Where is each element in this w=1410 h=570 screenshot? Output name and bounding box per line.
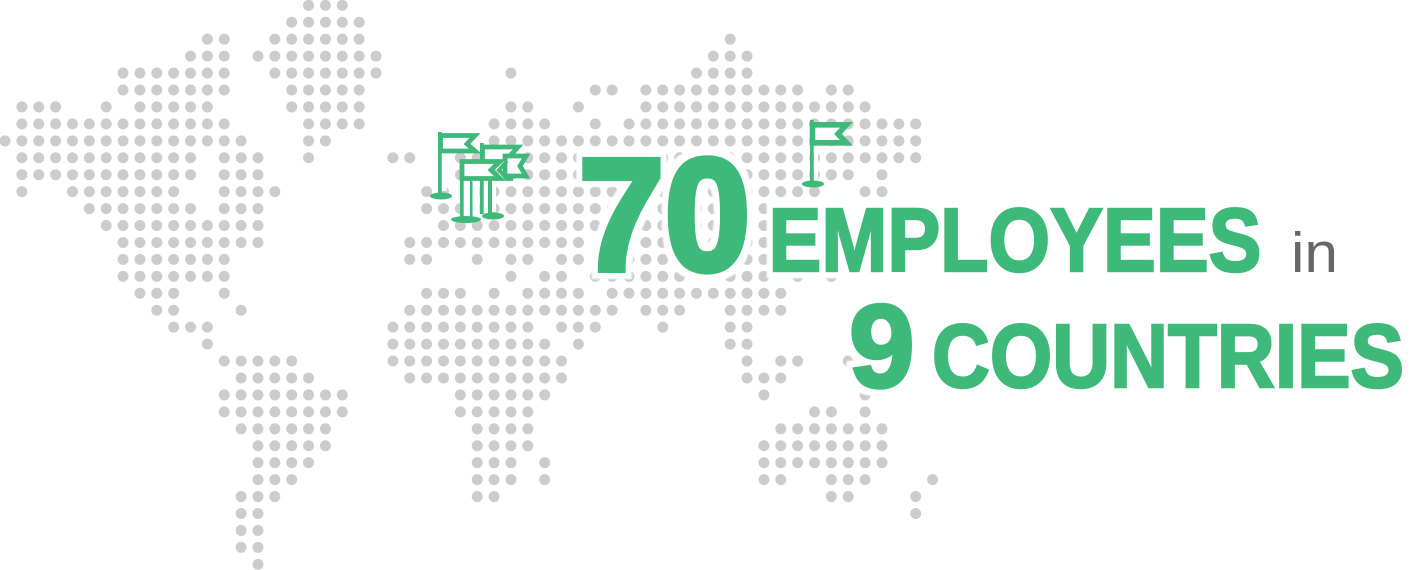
icon: flag front [451, 160, 513, 223]
number: 70: 70 [578, 125, 750, 304]
icon: cluster of flags [430, 132, 526, 223]
icon: flag back right [480, 143, 526, 220]
icon: flag back left [430, 132, 475, 200]
icon: single flag [802, 120, 846, 188]
heading: EMPLOYEES: EMPLOYEES [768, 191, 1262, 291]
number: 9: 9 [849, 281, 915, 413]
text: in: in [1291, 221, 1338, 285]
dotted world map [5, 5, 933, 564]
